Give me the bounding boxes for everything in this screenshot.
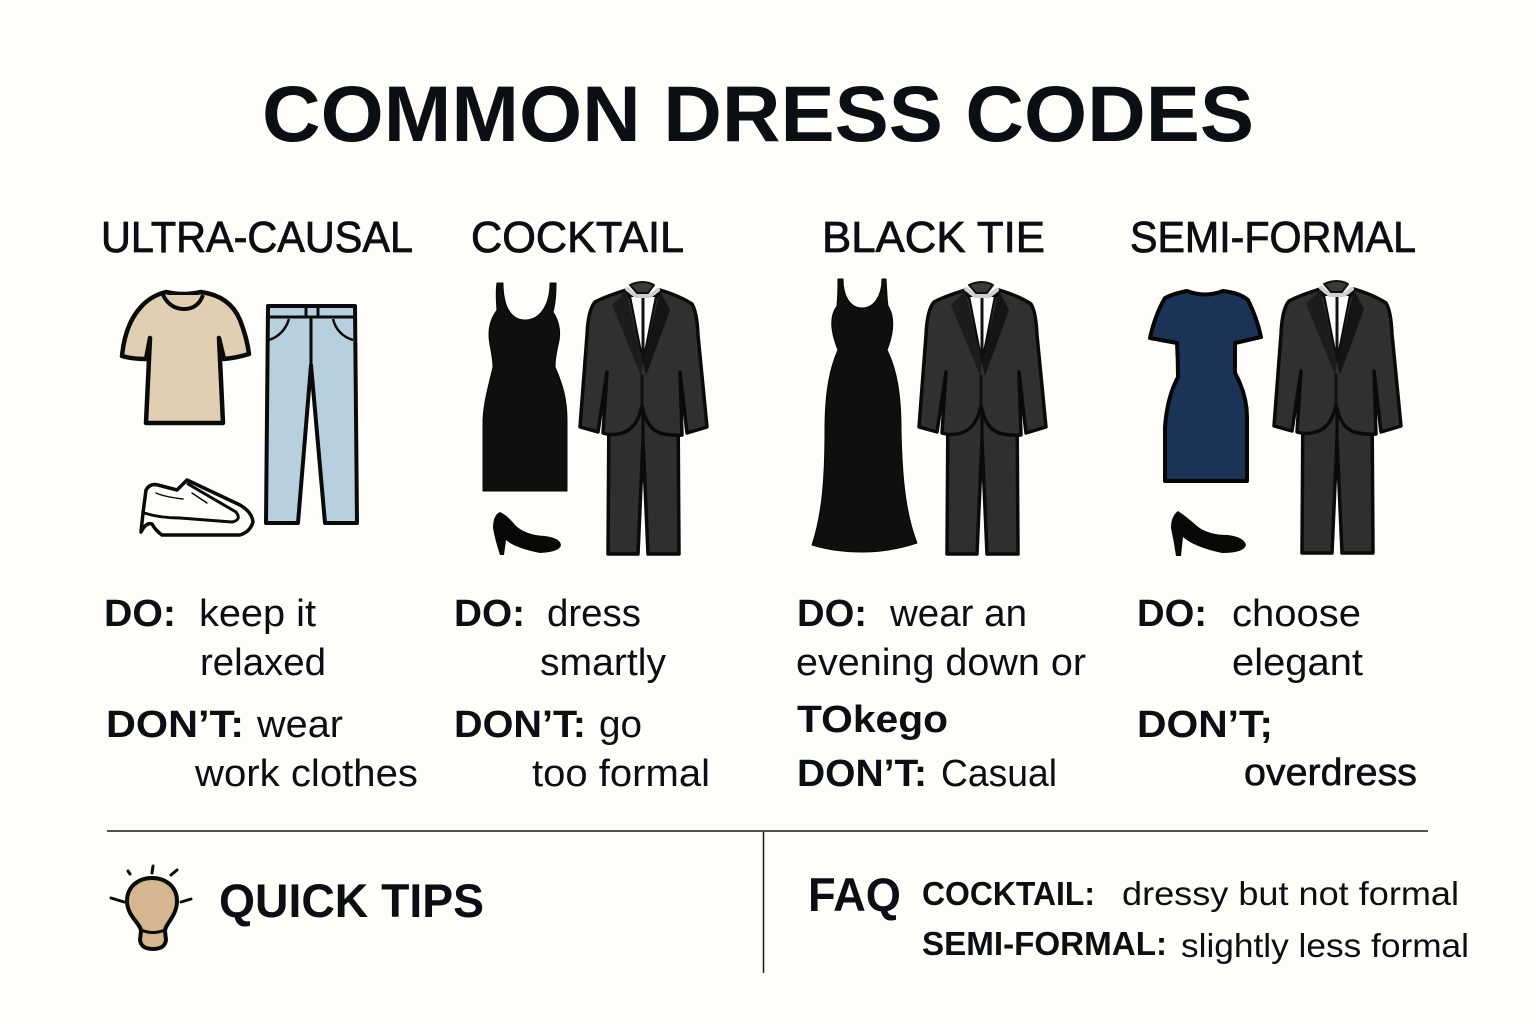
don't text: DON’T; [1137,704,1273,746]
don't text [106,704,418,795]
do text: evening down or [796,642,1086,684]
faq: semi-formal: slightly less formal [1181,927,1469,964]
don't text [797,753,1057,795]
do text: DO: [1137,593,1207,635]
don't text: DON’T: [454,704,586,746]
don't text: too formal [532,753,710,795]
don't text: wear [256,704,343,746]
do text [796,593,1086,741]
don't text: DON’T: [106,704,244,746]
do text [104,593,326,684]
do text: TOkego [797,699,948,741]
icon: light bulb [111,866,191,949]
do text [454,593,666,684]
panel: quick tips [111,866,484,949]
faq: cocktail [922,875,1459,912]
icon: navy dress [1150,291,1261,481]
panel: ultra-casual [101,213,418,795]
don't text: work clothes [194,753,418,795]
do text: keep it [199,593,316,635]
don't text: go [599,704,642,746]
heading: ultra-casual: ULTRA-CAUSAL [101,213,413,262]
icon: tuxedo [919,282,1046,554]
heading: black tie: BLACK TIE [822,213,1045,262]
do text [1137,593,1363,684]
don't text: overdress [1244,752,1417,794]
heading: faq: FAQ [808,868,901,921]
do text: wear an [889,593,1027,635]
don't text [1137,704,1417,794]
do text: dress [547,593,641,635]
icon: jeans [266,306,357,523]
don't text: Casual [941,753,1057,795]
panel: faq [808,868,1469,964]
heading: quick tips: QUICK TIPS [219,874,484,927]
do text: relaxed [200,642,326,684]
faq: cocktail: dressy but not formal [1122,875,1459,912]
panel: semi-formal [1130,213,1417,794]
title: COMMON DRESS CODES [262,69,1254,158]
faq: semi-formal [922,925,1469,964]
icon: heel [1171,511,1246,556]
panel: cocktail [454,213,710,795]
panel: black tie [796,213,1086,795]
do text: DO: [797,593,867,635]
icon: evening gown [812,279,917,552]
icon: t-shirt [122,292,249,423]
do text: DO: [104,593,176,635]
don't text [454,704,710,795]
heading: cocktail: COCKTAIL [471,213,684,262]
icon: tuxedo [580,282,707,554]
heading: semi-formal: SEMI-FORMAL [1130,213,1416,262]
do text: elegant [1232,642,1363,684]
icon: sneaker [141,480,253,535]
don't text: DON’T: [797,753,927,795]
do text: DO: [454,593,525,635]
do text: smartly [540,642,666,684]
icon: heel [493,512,561,555]
faq: semi-formal: SEMI-FORMAL: [922,925,1167,962]
faq: cocktail: COCKTAIL: [922,875,1095,912]
do text: choose [1232,593,1361,635]
icon: cocktail dress [483,283,567,491]
icon: suit [1274,281,1401,553]
